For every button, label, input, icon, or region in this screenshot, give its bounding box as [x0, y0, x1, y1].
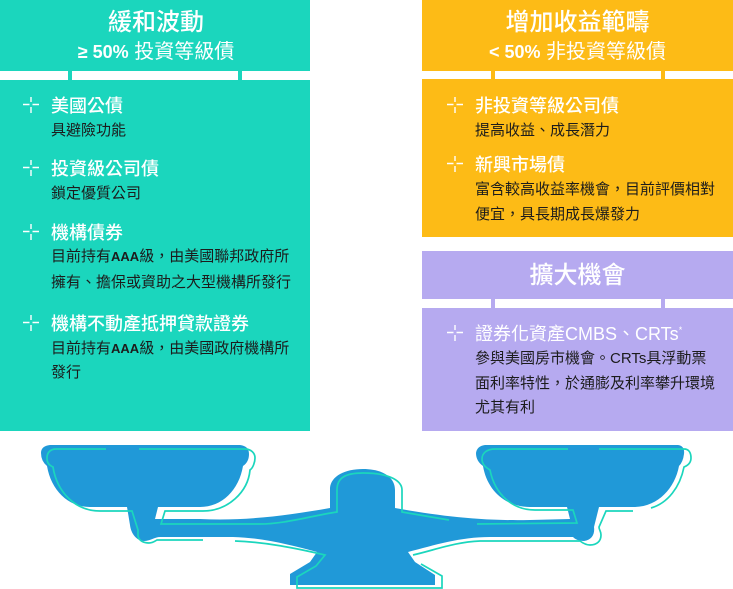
- connector: purple two: [661, 299, 665, 308]
- icon: plus: [447, 156, 463, 172]
- icon: plus: [447, 97, 463, 113]
- item text: 鎖定優質公司: [51, 185, 141, 202]
- panel: right header: [422, 0, 733, 71]
- item text: 參與美國房市機會。CRTs具浮動票: [475, 350, 706, 367]
- panel: purple body: [422, 308, 733, 431]
- item text: 發行: [51, 364, 81, 381]
- scale body: [41, 445, 684, 585]
- icon: plus: [23, 315, 39, 331]
- connector: left two: [238, 71, 242, 80]
- item heading: 非投資等級公司債: [475, 96, 619, 116]
- item text: 目前持有AAA級，由美國政府機構所: [51, 340, 289, 357]
- item heading: 美國公債: [51, 96, 123, 116]
- connector: right two: [661, 71, 665, 79]
- item text: 擁有、擔保或資助之大型機構所發行: [51, 274, 291, 291]
- subheading: left subtitle: ≥ 50% 投資等級債: [78, 41, 234, 63]
- heading: right title: 增加收益範疇: [506, 9, 650, 36]
- panel: right body: [422, 79, 733, 237]
- item text: 富含較高收益率機會，目前評價相對: [475, 181, 715, 198]
- item text: 具避險功能: [51, 122, 126, 139]
- item heading: 機構不動產抵押貸款證券: [51, 314, 249, 334]
- icon: plus: [23, 160, 39, 176]
- item text: 目前持有AAA級，由美國聯邦政府所: [51, 248, 289, 265]
- heading: left title: 緩和波動: [108, 9, 204, 36]
- icon: plus: [23, 224, 39, 240]
- item heading: 證券化資產CMBS、CRTs*: [475, 324, 682, 344]
- item text: 尤其有利: [475, 399, 535, 416]
- panel: purple header: [422, 251, 733, 299]
- panel: left body: [0, 80, 310, 431]
- item heading: 機構債券: [51, 223, 123, 243]
- chart: balance scale icon: [41, 445, 692, 589]
- item text: 便宜，具長期成長爆發力: [475, 206, 640, 223]
- connector: left one: [68, 71, 72, 80]
- panel: left header: [0, 0, 310, 71]
- heading: purple title: 擴大機會: [530, 262, 626, 289]
- item text: 面利率特性，於通膨及利率攀升環境: [475, 375, 715, 392]
- item heading: 新興市場債: [475, 155, 565, 175]
- icon: plus: [23, 97, 39, 113]
- connector: purple one: [491, 299, 495, 308]
- item text: 提高收益、成長潛力: [475, 122, 610, 139]
- icon: plus: [447, 325, 463, 341]
- item heading: 投資級公司債: [51, 159, 159, 179]
- scale outline: [47, 449, 691, 588]
- connector: right one: [491, 71, 495, 79]
- subheading: right subtitle: < 50% 非投資等級債: [489, 41, 666, 63]
